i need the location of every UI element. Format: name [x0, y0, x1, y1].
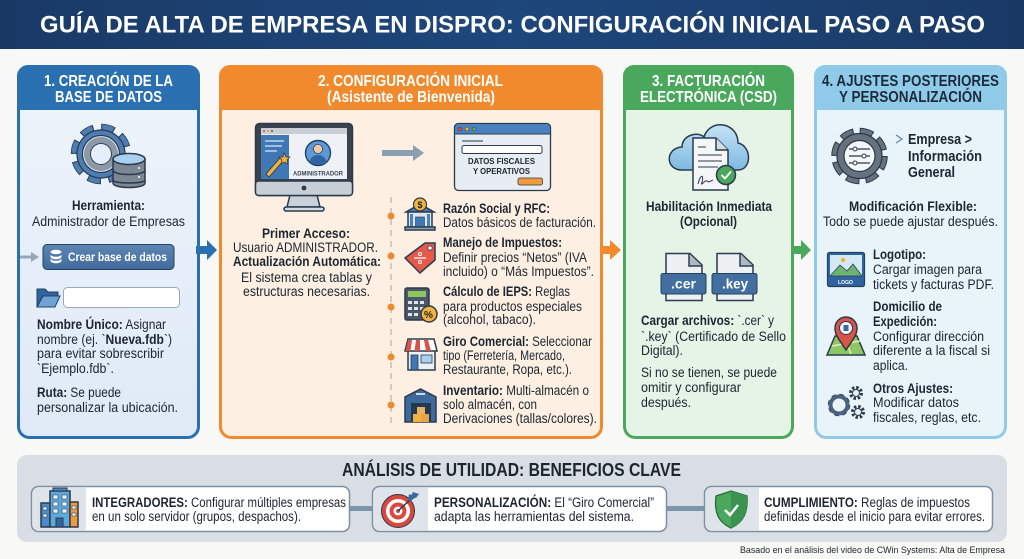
icon: calculator: % [424, 310, 433, 321]
icon: gears [830, 388, 864, 418]
text: domicilio de expedición [873, 299, 990, 373]
text: inventario [443, 383, 597, 426]
panel: 3 facturación electrónica [623, 65, 794, 438]
text: ruta: Ruta: Se puede [37, 385, 121, 400]
icon: map pin [827, 317, 865, 355]
text: primer acceso: Primer Acceso: [262, 226, 350, 241]
text: nombre único [37, 317, 172, 376]
heading [822, 73, 999, 106]
text: definidas desde el inicio para evitar errores. [764, 509, 985, 524]
text: cargar archivos: Digital). [641, 343, 683, 358]
text: menu path: General [908, 165, 955, 181]
panel: 2 configuración inicial [219, 65, 603, 438]
heading: BASE DE DATOS [55, 89, 162, 106]
text: menu path: Información [908, 149, 982, 165]
heading: (Asistente de Bienvenida) [327, 89, 495, 106]
timeline [388, 197, 394, 425]
arrow: into button [20, 252, 39, 262]
text: inventario: Inventario: Multi-almacén o [443, 383, 589, 398]
icon: key file: .key [722, 276, 748, 292]
text: cargar archivos: Cargar archivos: `.cer` y [641, 313, 774, 328]
text: primer acceso: Actualización Automática: [233, 254, 381, 269]
icon: logo image [828, 252, 864, 286]
icon: folder and name field [37, 288, 180, 308]
icon: cer file [661, 254, 706, 300]
icon: cer file: .cer [671, 276, 697, 292]
text: modificación flexible [823, 199, 998, 229]
icon: bank [405, 198, 435, 230]
icon: gear with database [75, 128, 145, 188]
heading: ANÁLISIS DE UTILIDAD: BENEFICIOS CLAVE [342, 459, 681, 480]
text: cargar archivos: `.key` (Certificado de Sello [641, 329, 786, 344]
heading [44, 71, 173, 106]
text: otros ajustes [873, 381, 981, 425]
panel: análisis de utilidad [17, 455, 1007, 542]
heading: 2. CONFIGURACIÓN INICIAL [318, 71, 503, 90]
icon: key file [712, 254, 757, 300]
text: manejo de impuestos: Definir precios “Netos” (IVA [443, 250, 587, 265]
text: manejo de impuestos [443, 235, 594, 279]
icon: store [405, 339, 437, 370]
text: otros ajustes: Otros Ajustes: [873, 381, 953, 396]
text: giro comercial: Restaurante, Ropa, etc.). [443, 362, 572, 377]
heading: ELECTRÓNICA (CSD) [640, 87, 777, 106]
text: habilitación inmediata [646, 199, 772, 229]
connector: integradores to personalización [350, 506, 373, 511]
text: menu path: Empresa > [908, 132, 972, 148]
arrow: monitor to form [382, 145, 424, 161]
text: cálculo de IEPS: para productos especiales [443, 299, 582, 314]
heading [640, 71, 777, 106]
text: cálculo de IEPS [443, 284, 582, 327]
text: otros ajustes: Modificar datos [873, 395, 959, 410]
icon: buildings [41, 488, 78, 527]
card: personalización [372, 486, 666, 532]
text: domicilio de expedición: diferente a la fiscal si [873, 343, 990, 358]
text: razón social: Razón Social y RFC: [443, 201, 550, 216]
icon: tax tag [405, 243, 435, 273]
text: modificación flexible: Todo se puede ajustar después. [823, 214, 998, 229]
title banner [0, 0, 1024, 49]
text: habilitación inmediata: (Opcional) [680, 214, 737, 229]
text: domicilio de expedición: aplica. [873, 358, 908, 373]
title banner: GUÍA DE ALTA DE EMPRESA EN DISPRO: CONFIGURACIÓN INICIAL PASO A PASO [40, 10, 985, 38]
text: cargar archivos [641, 313, 786, 358]
icon: fiscal data window [454, 124, 550, 190]
text: PERSONALIZACIÓN: El “Giro Comercial” [434, 495, 654, 510]
text: ruta: personalizar la ubicación. [37, 400, 178, 415]
text: nombre único: `Ejemplo.fdb`. [37, 361, 114, 376]
icon: fiscal data window: Y OPERATIVOS [473, 167, 531, 176]
text: domicilio de expedición: Expedición: [873, 314, 937, 329]
tool text: Herramienta: [72, 198, 145, 213]
heading: 1. CREACIÓN DE LA [44, 71, 173, 90]
tool text [32, 198, 185, 229]
text [92, 495, 346, 524]
text: razón social [443, 201, 596, 230]
text: en un solo servidor (grupos, despachos). [92, 509, 301, 524]
text: CUMPLIMIENTO: Reglas de impuestos [764, 495, 970, 510]
text: adapta las herramientas del sistema. [434, 509, 634, 524]
text: primer acceso [233, 226, 381, 299]
text: INTEGRADORES: Configurar múltiples empresas [92, 495, 346, 510]
icon: shield [716, 491, 747, 528]
text: ruta [37, 385, 178, 415]
icon: monitor with administrator screen: ADMINISTRADOR [293, 170, 343, 178]
tool text: Administrador de Empresas [32, 214, 185, 229]
heading: Y PERSONALIZACIÓN [839, 87, 982, 106]
text: logotipo [873, 247, 994, 292]
text: giro comercial: Giro Comercial: Seleccionar [443, 334, 592, 349]
card: integradores [32, 486, 350, 532]
text: manejo de impuestos: Manejo de Impuestos: [443, 235, 562, 250]
icon: fiscal data window: DATOS FISCALES [468, 157, 536, 166]
icon: calculator [405, 288, 437, 322]
text: opcional note: Si no se tienen, se puede [641, 365, 777, 380]
text: giro comercial: tipo (Ferretería, Mercado, [443, 348, 565, 363]
icon: logo image: LOGO [838, 280, 854, 286]
arrow: step 2 to step 3 [600, 240, 621, 260]
text: opcional note [641, 365, 777, 410]
footer credit: Basado en el análisis del video de CWin Systems: Alta de Empresa [740, 545, 1006, 556]
text: inventario: Derivaciones (tallas/colores). [443, 411, 597, 426]
text: modificación flexible: Modificación Flexible: [849, 199, 977, 214]
text: razón social: Datos básicos de facturación. [443, 215, 596, 230]
text: cálculo de IEPS: Cálculo de IEPS: Reglas [443, 284, 570, 299]
text: menu path [896, 132, 982, 181]
heading: 3. FACTURACIÓN [652, 71, 765, 90]
button: crear base de datos: Crear base de datos [68, 252, 167, 264]
text: primer acceso: estructuras necesarias. [243, 284, 370, 299]
text: inventario: solo almacén, con [443, 397, 537, 412]
icon: monitor with administrator screen [256, 124, 352, 211]
text: habilitación inmediata: Habilitación Inmediata [646, 199, 772, 214]
text: primer acceso: Usuario ADMINISTRADOR. [233, 240, 378, 255]
heading [318, 71, 503, 106]
button: crear base de datos [43, 244, 174, 270]
text [764, 495, 985, 524]
text: logotipo: Logotipo: [873, 247, 926, 262]
panel: 1 creación de la base de datos [17, 65, 200, 438]
text: otros ajustes: fiscales, reglas, etc. [873, 410, 981, 425]
text: domicilio de expedición: Configurar dirección [873, 329, 984, 344]
connector: personalización to cumplimiento [667, 506, 705, 511]
text: primer acceso: El sistema crea tablas y [241, 270, 372, 285]
text: opcional note: omitir y configurar [641, 380, 741, 395]
text [434, 495, 654, 524]
icon: cloud with signed document [669, 125, 748, 190]
icon: warehouse [405, 389, 436, 422]
text: logotipo: Cargar imagen para [873, 262, 982, 277]
text: nombre único: para evitar sobrescribir [37, 346, 164, 361]
card: cumplimiento [704, 486, 992, 532]
text: logotipo: tickets y facturas PDF. [873, 277, 994, 292]
arrow: step 3 to step 4 [792, 240, 811, 260]
icon: bank: $ [418, 200, 423, 210]
text: giro comercial [443, 334, 592, 377]
icon: settings gear [836, 132, 884, 180]
icon: target [382, 492, 419, 528]
text: domicilio de expedición: Domicilio de [873, 299, 942, 314]
text: nombre único: Nombre Único: Asignar [37, 317, 166, 332]
text: cálculo de IEPS: (alcohol, tabaco). [443, 312, 536, 327]
text: nombre único: nombre (ej. `Nueva.fdb`) [37, 332, 172, 347]
text: opcional note: después. [641, 395, 691, 410]
arrow: step 1 to step 2 [196, 240, 217, 260]
panel: 4 ajustes posteriores [814, 65, 1007, 438]
text: manejo de impuestos: incluido) o “Más Impuestos”. [443, 264, 594, 279]
